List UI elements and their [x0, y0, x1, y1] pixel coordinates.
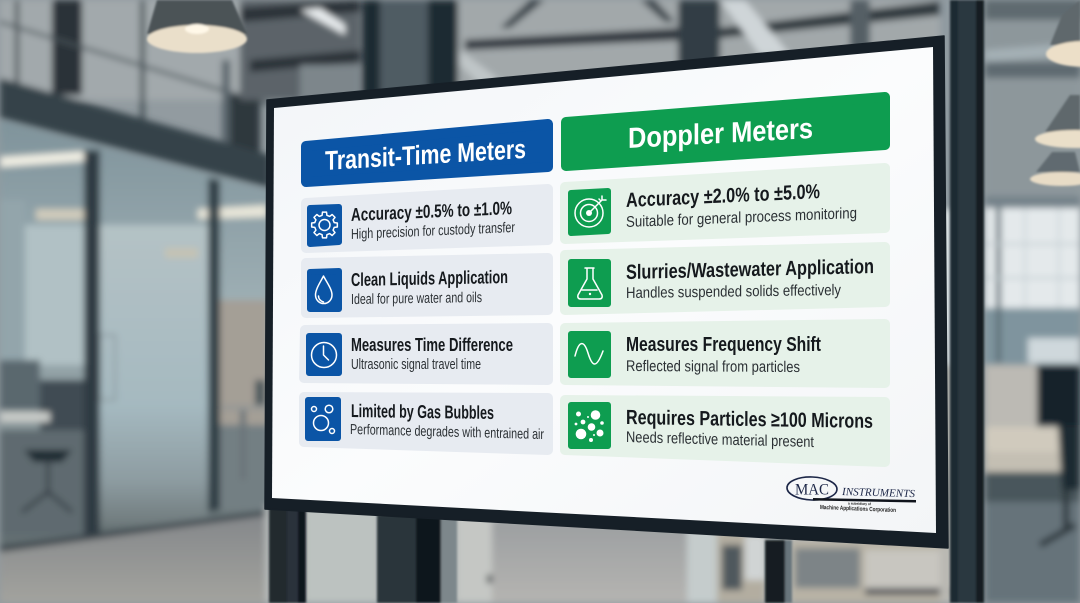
card: particles: [565, 400, 885, 462]
logo: MAC Instruments: a subsidiary of: [848, 502, 872, 506]
card: frequency shift: Reflected signal from particles: [626, 358, 800, 376]
card: gas bubbles: [304, 397, 548, 450]
icon: particles: [571, 405, 608, 446]
icon: clock: [309, 336, 339, 373]
right pendant lamps: [1030, 0, 1080, 186]
ceiling and upper windows left: [0, 0, 270, 100]
heading bar: Doppler Meters: [566, 97, 885, 166]
centre posts top: [362, 0, 380, 110]
logo: MAC Instruments: MAC: [795, 482, 829, 498]
card: gas bubbles: Limited by Gas Bubbles: [351, 400, 494, 423]
card: slurries: Handles suspended solids effectively: [626, 282, 841, 302]
icon: target: [571, 191, 608, 233]
card: time difference: [304, 328, 548, 380]
logo: MAC Instruments: [787, 476, 916, 514]
logo: MAC Instruments: INSTRUMENTS: [841, 486, 915, 500]
icon: bubbles: [308, 400, 338, 438]
right window sliver behind post: [940, 0, 952, 210]
screen: [272, 47, 936, 533]
card: frequency shift: [565, 324, 885, 383]
monitor frame: [265, 36, 948, 548]
card: accuracy: High precision for custody transfer: [351, 220, 515, 243]
card: accuracy: Accuracy ±2.0% to ±5.0%: [626, 180, 820, 212]
card: frequency shift: Measures Frequency Shift: [626, 333, 821, 356]
glass left: [0, 120, 270, 552]
card: particles: Needs reflective material present: [626, 429, 815, 451]
card: slurries: [565, 247, 885, 310]
logo: MAC Instruments: Machine Applications Corporation: [820, 505, 896, 514]
card: particles: Requires Particles ≥100 Microns: [626, 406, 873, 433]
right side: [985, 0, 1080, 205]
card: time difference: Measures Time Difference: [351, 334, 513, 355]
left pendant lamp: [147, 0, 247, 53]
icon: flask: [571, 262, 608, 304]
panel: Doppler Meters column: [565, 97, 885, 462]
card: clean liquids: Clean Liquids Application: [351, 266, 508, 290]
lights in glass: [0, 151, 88, 167]
card: gas bubbles: Performance degrades with entrained air: [350, 422, 544, 443]
floor: [0, 515, 270, 603]
heading bar: Doppler Meters: Doppler Meters: [628, 113, 813, 155]
card: accuracy: Accuracy ±0.5% to ±1.0%: [351, 197, 512, 225]
centre top ceiling: [458, 0, 958, 105]
heading bar: Transit-Time Meters: [306, 124, 548, 182]
icon: sine wave: [571, 334, 608, 375]
card: clean liquids: [306, 258, 548, 313]
horizontal beam: [0, 78, 270, 188]
card: slurries: Slurries/Wastewater Application: [626, 255, 874, 284]
bottom centre: [265, 505, 965, 603]
icon: gear: [310, 207, 339, 244]
card: clean liquids: Ideal for pure water and oils: [351, 290, 482, 308]
card: accuracy: Suitable for general process monitoring: [626, 205, 857, 231]
heading bar: Transit-Time Meters: Transit-Time Meters: [325, 134, 526, 176]
panel: Transit-Time Meters column: [304, 124, 548, 450]
mullions: [84, 150, 100, 537]
structural posts behind and beside the monitor: [269, 0, 984, 603]
card: time difference: Ultrasonic signal travel time: [351, 357, 481, 373]
card: accuracy: [306, 189, 548, 248]
card: accuracy: [565, 168, 885, 239]
icon: water drop: [310, 271, 339, 309]
